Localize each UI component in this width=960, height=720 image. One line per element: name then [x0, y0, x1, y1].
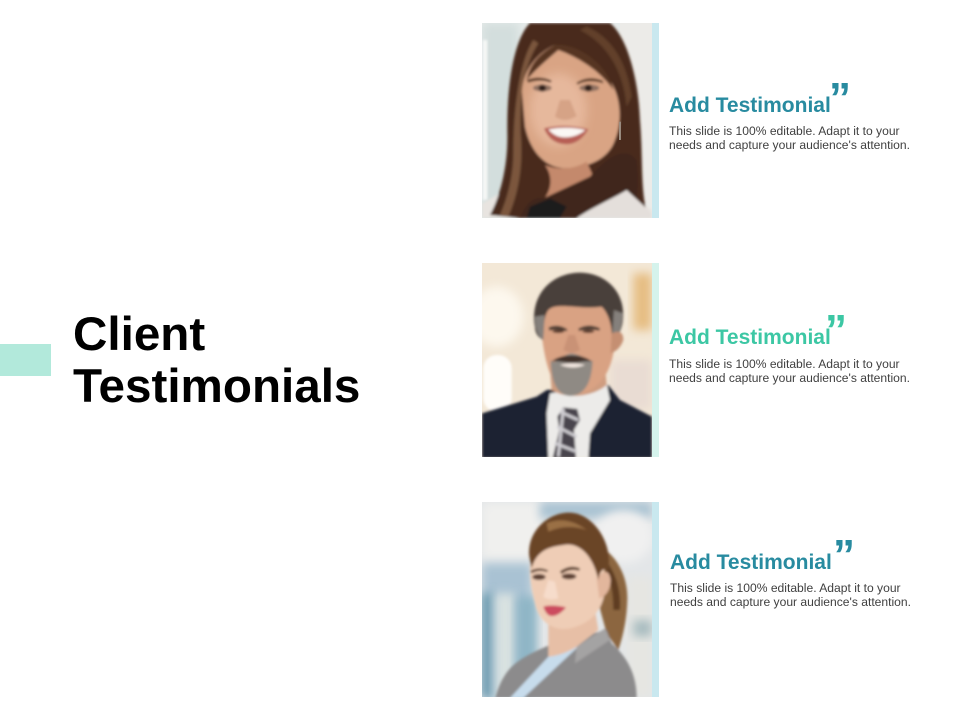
accent bar	[0, 344, 51, 376]
portrait: woman with ponytail in grey blazer	[482, 502, 653, 698]
title	[73, 308, 360, 413]
testimonial 1 heading: Add Testimonial	[669, 94, 831, 117]
testimonial 3 text: This slide is 100% editable. Adapt it to your	[670, 581, 901, 595]
portrait: smiling woman with long brown hair	[482, 23, 652, 218]
title: Client	[73, 308, 205, 361]
side strip 2	[652, 263, 659, 457]
title: Testimonials	[73, 360, 360, 413]
testimonial 2 text: This slide is 100% editable. Adapt it to your	[669, 357, 900, 371]
testimonial 2 heading: Add Testimonial	[669, 326, 831, 349]
testimonial 2 text	[669, 357, 910, 385]
testimonial 1 text: This slide is 100% editable. Adapt it to your	[669, 124, 900, 138]
side strip 1	[652, 23, 659, 218]
testimonial 1 text	[669, 124, 910, 152]
portrait: man with grey beard in dark suit	[470, 263, 652, 458]
side strip 3	[652, 502, 659, 697]
testimonial 3 text: needs and capture your audience's attention.	[670, 595, 911, 609]
testimonial 3 text	[670, 581, 911, 609]
testimonial 2 text: needs and capture your audience's attention.	[669, 371, 910, 385]
testimonial 3 heading: Add Testimonial	[670, 551, 832, 574]
testimonial 1 text: needs and capture your audience's attention.	[669, 138, 910, 152]
